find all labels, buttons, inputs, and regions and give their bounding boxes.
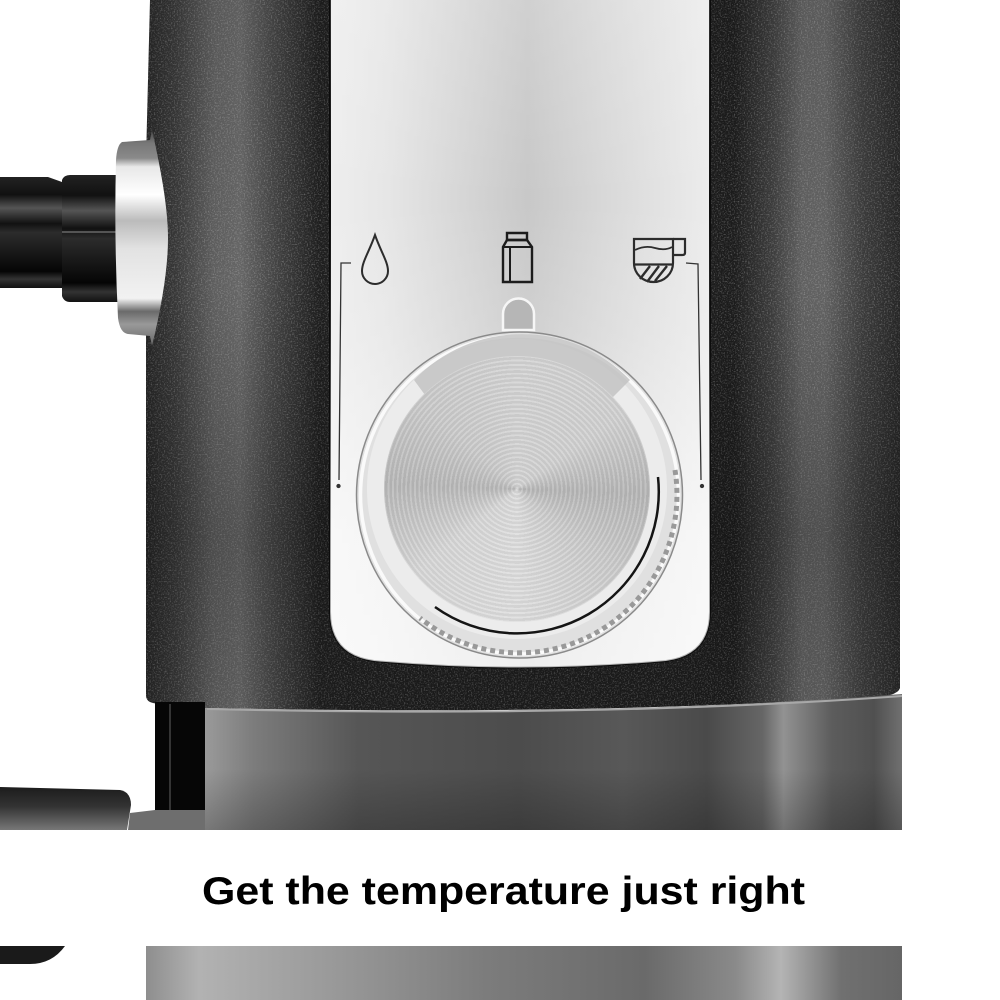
machine body	[146, 0, 900, 710]
drip tray arm	[128, 810, 205, 830]
left scale bracket	[337, 263, 351, 488]
caption heading: Get the temperature just right	[202, 870, 805, 913]
white caption band	[0, 830, 1000, 946]
base section	[205, 694, 902, 830]
shadow gap under body	[155, 702, 205, 812]
right scale bracket	[686, 263, 704, 488]
icon: milk carton	[503, 233, 532, 282]
steam wand connector	[0, 175, 118, 302]
icon: coffee cup	[634, 239, 685, 282]
silver ring knob	[115, 130, 168, 346]
lower base section	[146, 946, 902, 1000]
portafilter handle	[0, 787, 131, 830]
control panel	[330, 0, 710, 668]
dial pointer	[503, 298, 534, 330]
portafilter lower edge	[0, 946, 65, 964]
icon: water drop	[362, 235, 388, 284]
dial brushed metal disc	[384, 356, 650, 622]
temperature dial	[356, 332, 682, 658]
